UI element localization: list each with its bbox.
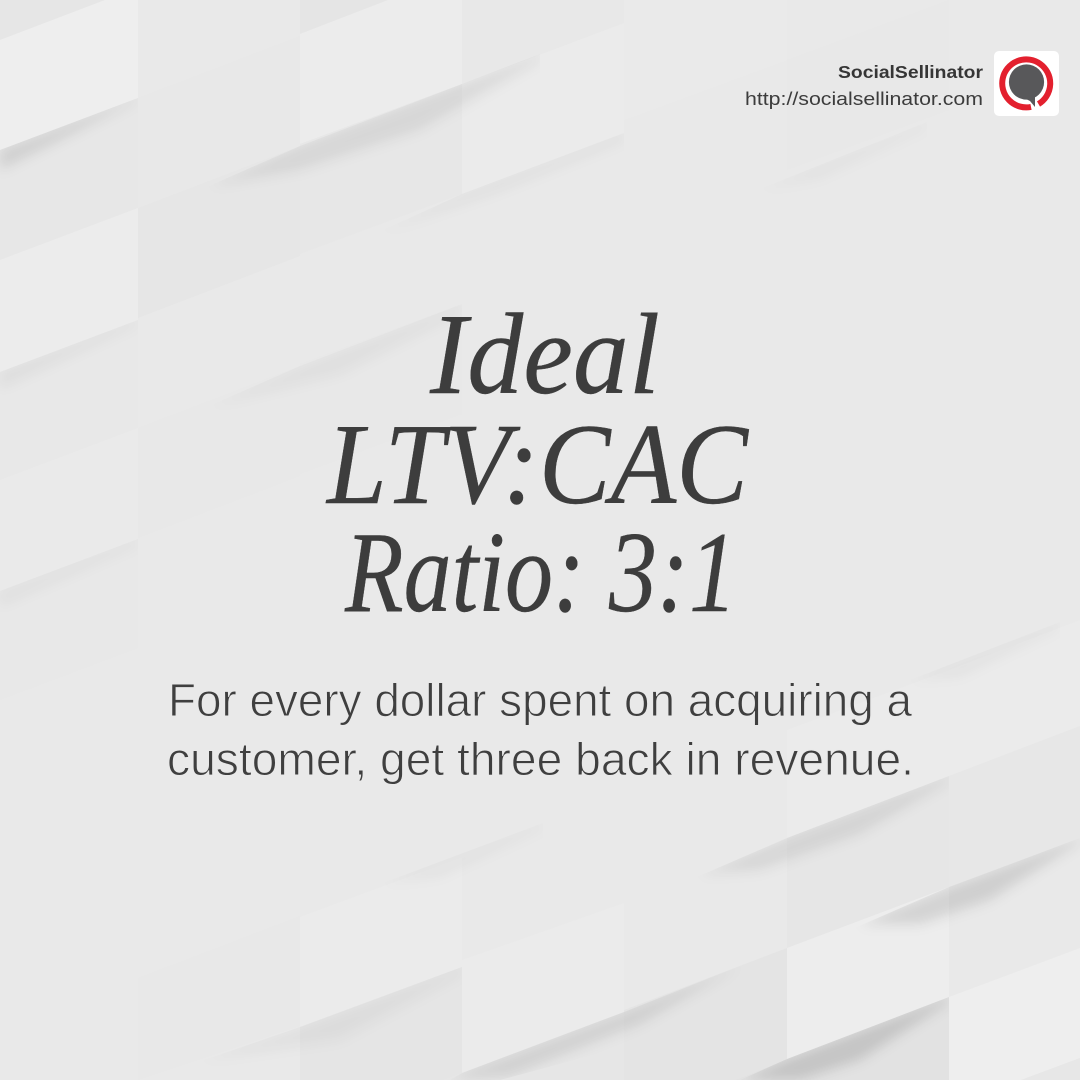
brand name: SocialSellinator [838,62,983,82]
icon: SocialSellinator logo [994,51,1059,116]
description line 1: For every dollar spent on acquiring a [168,674,912,726]
title line: Ideal: Ideal [429,291,660,419]
website URL: http://socialsellinator.com [745,89,983,109]
title line: Ratio: 3:1: Ratio: 3:1 [344,509,737,637]
description text [167,674,914,785]
title [325,291,750,637]
title line: LTV:CAC: LTV:CAC [325,401,750,529]
description line 2: customer, get three back in revenue. [167,733,914,785]
